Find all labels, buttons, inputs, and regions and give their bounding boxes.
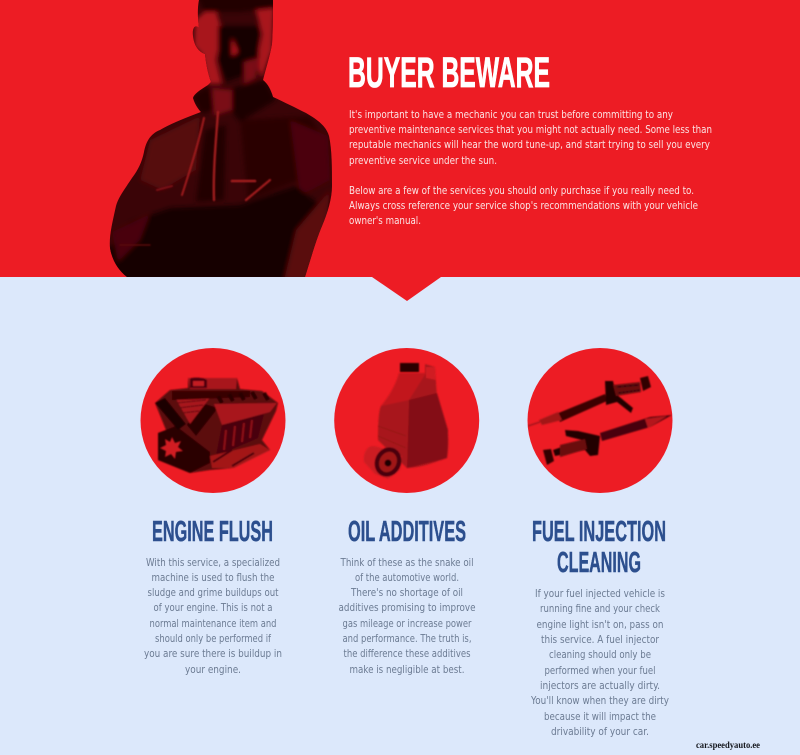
text: fuel injection cleaning: cleaning should only be xyxy=(549,649,651,661)
heading: fuel injection cleaning: CLEANING xyxy=(557,547,641,579)
text: oil additives: gas mileage or increase power xyxy=(342,618,472,630)
intro text: owner's manual. xyxy=(349,215,421,227)
text: oil additives xyxy=(338,557,476,676)
text: engine flush: should only be performed if xyxy=(155,633,271,645)
text: fuel injection cleaning xyxy=(530,588,669,738)
oil filter xyxy=(364,446,402,479)
heading: fuel injection cleaning: FUEL INJECTION xyxy=(532,516,666,548)
jacket upper xyxy=(140,116,200,190)
icon: fuel injectors xyxy=(528,348,672,493)
text: engine flush xyxy=(144,557,282,676)
intro text: Always cross reference your service shop's recommendations with your vehicle xyxy=(349,200,698,212)
text: engine flush: your engine. xyxy=(185,664,241,676)
text: engine flush: With this service, a specialized xyxy=(146,557,280,569)
intro text: preventive maintenance services that you might not actually need. Some less than xyxy=(349,124,712,136)
text: engine flush: normal maintenance item and xyxy=(150,618,276,630)
text: oil additives: make is negligible at best. xyxy=(350,664,464,676)
text: fuel injection cleaning: this service. A fuel injector xyxy=(541,634,660,646)
column: fuel injection cleaning xyxy=(530,516,669,738)
engine fan xyxy=(160,437,183,459)
text: oil additives: Think of these as the snake oil xyxy=(340,557,474,569)
face tones xyxy=(194,4,222,84)
text: oil additives: and performance. The truth is, xyxy=(342,633,472,645)
text: engine flush: you are sure there is buildup in xyxy=(144,648,282,660)
text: fuel injection cleaning: performed when your fuel xyxy=(544,665,656,677)
mechanic portrait xyxy=(100,0,340,280)
text: oil additives: additives promising to improve xyxy=(338,602,476,614)
icon: engine xyxy=(140,348,286,493)
intro text: Below are a few of the services you should only purchase if you really need to. xyxy=(349,185,694,197)
icon: oil bottle and filter xyxy=(334,348,479,493)
text: engine flush: machine is used to flush the xyxy=(152,572,274,584)
text: oil additives: There's no shortage of oil xyxy=(350,587,463,599)
text: fuel injection cleaning: because it will impact the xyxy=(544,711,656,723)
text: fuel injection cleaning: If your fuel injected vehicle is xyxy=(535,588,665,600)
zip and seam highlights xyxy=(182,118,204,195)
crossed arms xyxy=(108,186,320,280)
text: engine flush: sludge and grime buildups out xyxy=(148,587,278,599)
heading: fuel injection cleaning xyxy=(532,516,666,579)
text: fuel injection cleaning: You'll know when they are dirty xyxy=(530,695,669,707)
heading: oil additives: OIL ADDITIVES xyxy=(348,516,466,548)
intro text: preventive service under the sun. xyxy=(349,155,497,167)
text: fuel injection cleaning: injectors are actually dirty. xyxy=(540,680,660,692)
column: oil additives xyxy=(338,516,476,676)
text: fuel injection cleaning: engine light isn't on, pass on xyxy=(536,619,664,631)
collar xyxy=(193,86,212,114)
text: oil additives: the difference these additives xyxy=(344,648,470,660)
text: fuel injection cleaning: drivability of your car. xyxy=(551,726,649,738)
heading: engine flush: ENGINE FLUSH xyxy=(152,516,273,548)
intro text xyxy=(349,109,712,227)
intro text: reputable mechanics will hear the word tune-up, and start trying to sell you every xyxy=(349,139,710,151)
intro text: It's important to have a mechanic you can trust before committing to any xyxy=(349,109,673,121)
column: engine flush xyxy=(144,516,282,676)
text: fuel injection cleaning: running fine and your check xyxy=(540,603,661,615)
text: engine flush: of your engine. This is not a xyxy=(154,602,272,614)
text: oil additives: of the automotive world. xyxy=(355,572,459,584)
header panel with pointer xyxy=(0,0,800,301)
watermark: car.speedyauto.ee xyxy=(696,740,760,750)
title: BUYER BEWARE xyxy=(348,49,550,97)
